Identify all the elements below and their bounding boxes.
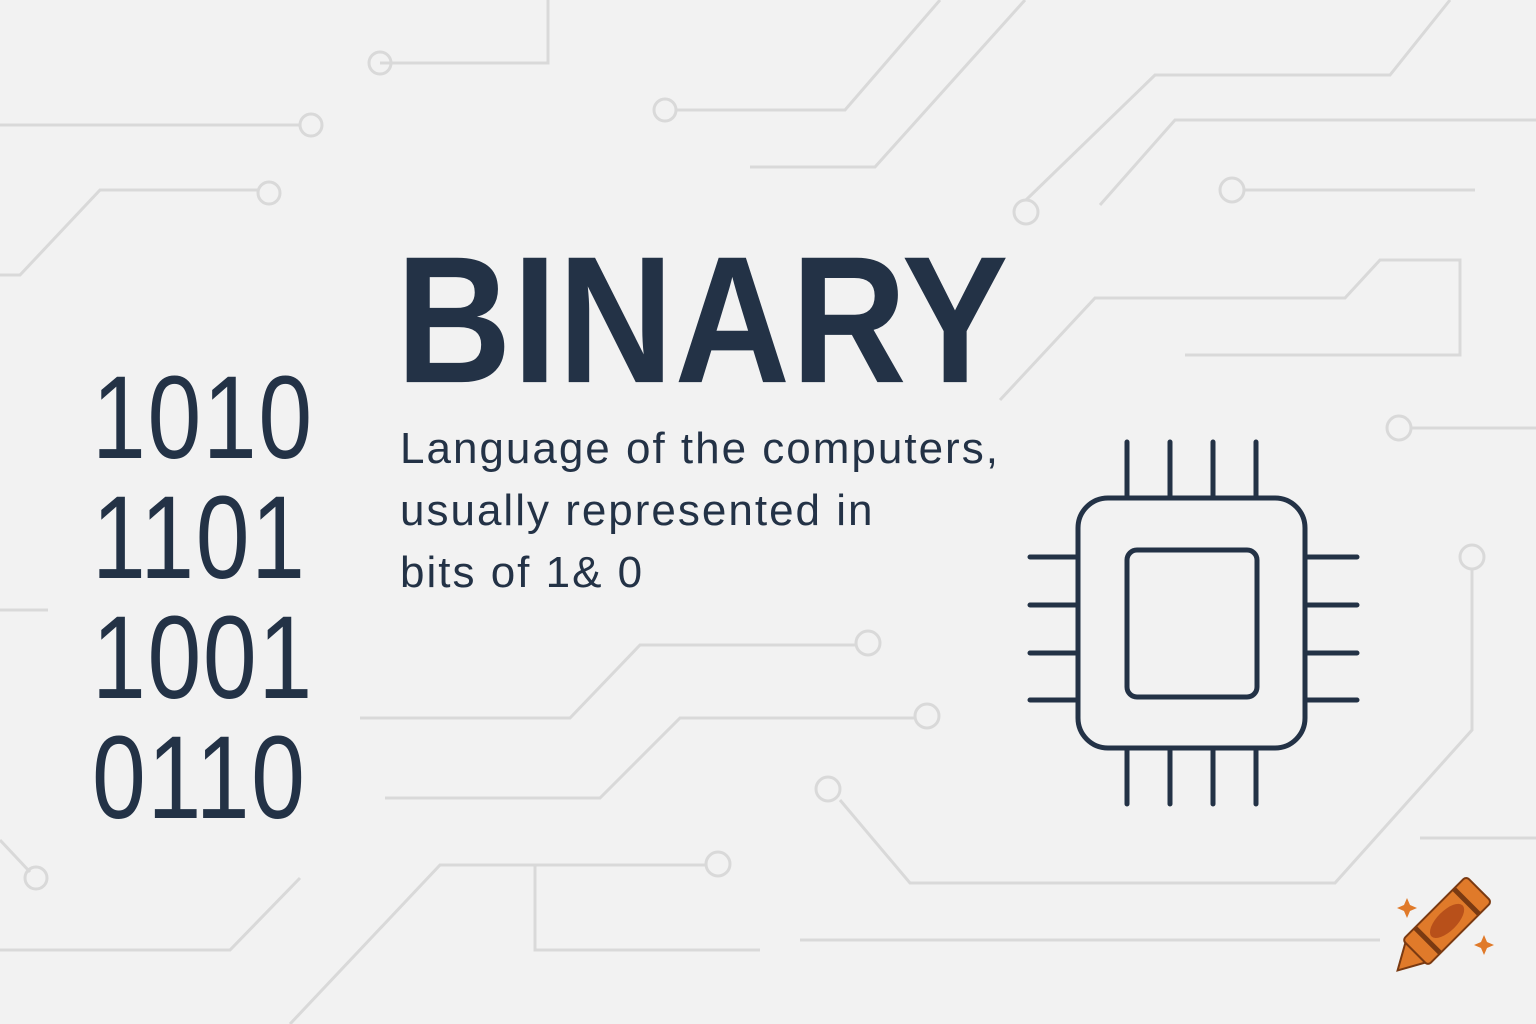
icon: chip (1028, 440, 1360, 806)
binary digits (92, 352, 314, 844)
binary digits: 1010 (92, 352, 314, 484)
title: BINARY (396, 218, 1009, 421)
subtitle text: usually represented in (400, 486, 874, 535)
subtitle text: bits of 1& 0 (400, 548, 644, 597)
subtitle text (400, 424, 1000, 597)
binary digits: 1101 (92, 472, 307, 604)
binary digits: 0110 (92, 712, 307, 844)
subtitle text: Language of the computers, (400, 424, 1000, 473)
icon: crayon (1396, 877, 1494, 972)
binary digits: 1001 (92, 592, 314, 724)
